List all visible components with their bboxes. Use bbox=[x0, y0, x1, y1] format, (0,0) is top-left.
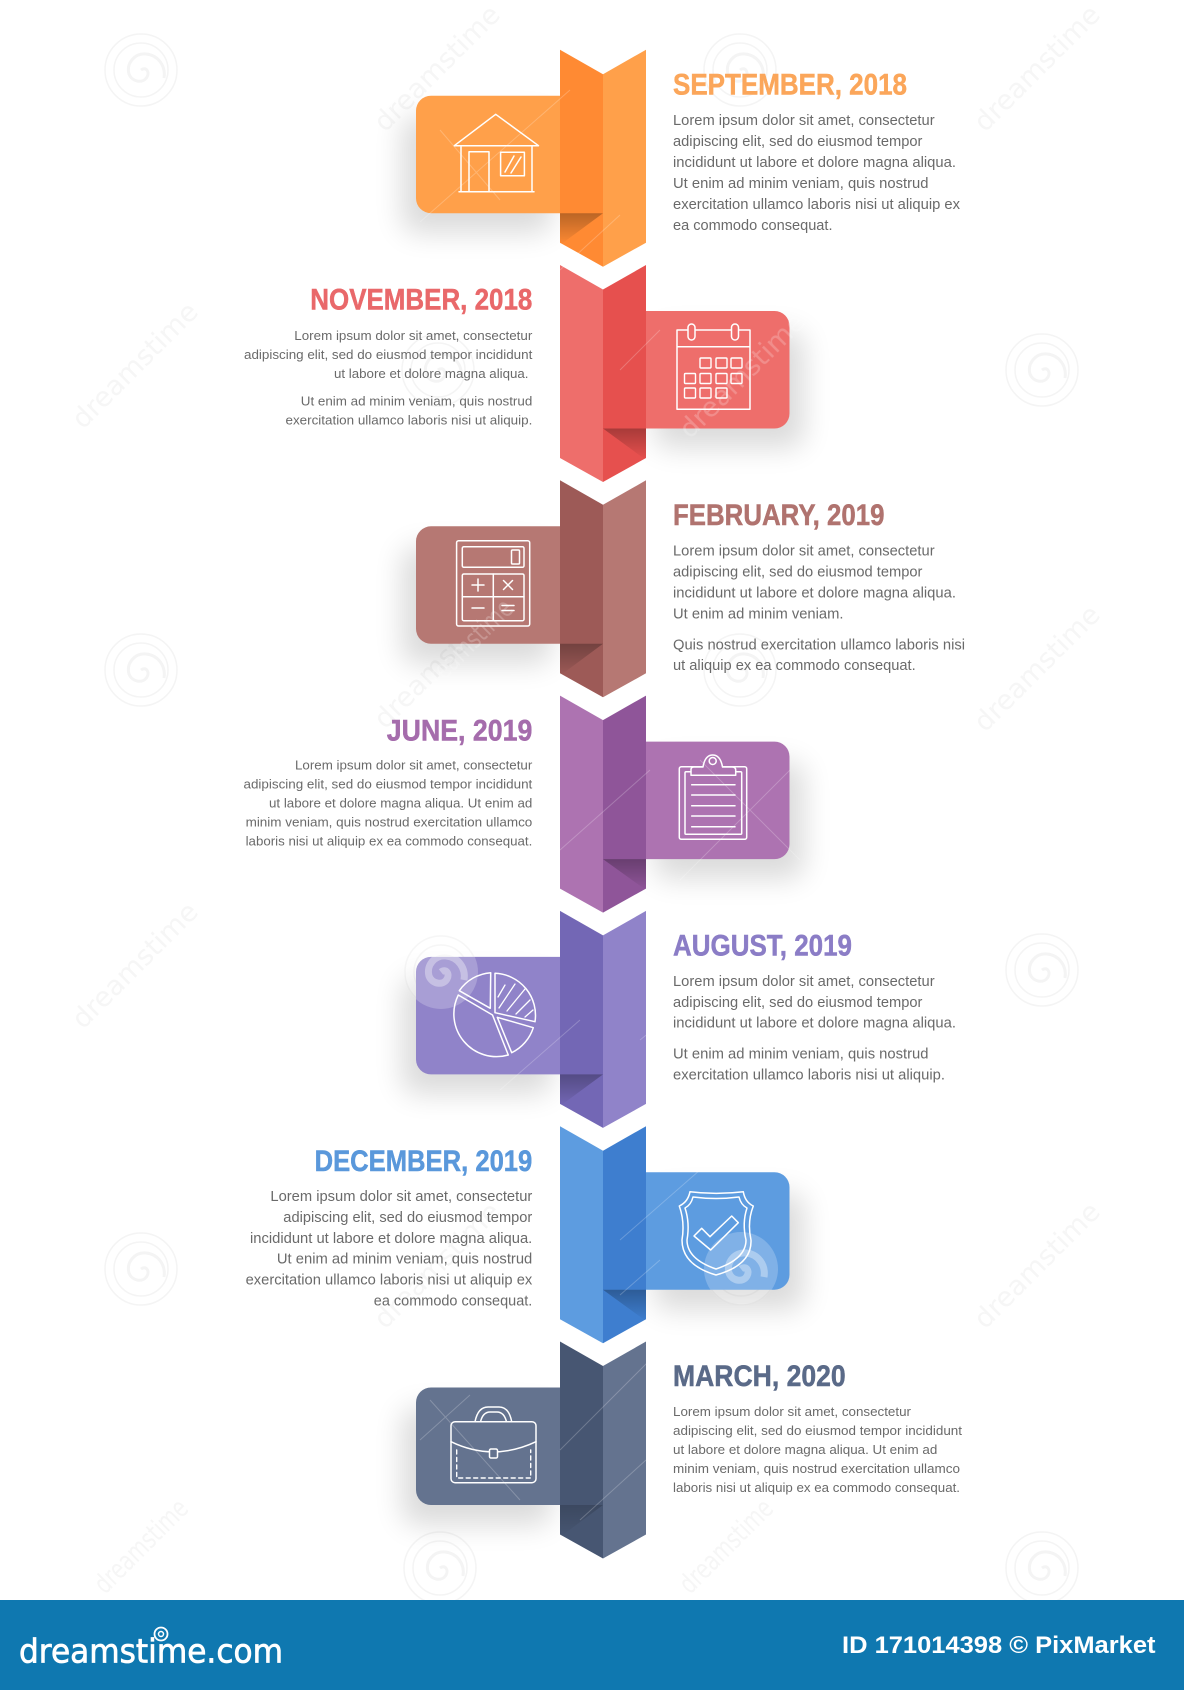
step 1: September 2018 bbox=[402, 50, 961, 267]
body text: incididunt ut labore et dolore magna aliqua. bbox=[250, 1231, 532, 1247]
watermark layer: background: dreamstime bbox=[66, 896, 205, 1035]
card bbox=[416, 1388, 576, 1505]
card bbox=[630, 311, 790, 428]
body text: adipiscing elit, sed do eiusmod tempor incididunt bbox=[244, 776, 533, 792]
watermark layer: background: dreamstime bbox=[673, 1493, 780, 1600]
body text: Ut enim ad minim veniam, quis nostrud bbox=[301, 394, 532, 409]
body text bbox=[244, 758, 533, 848]
watermark layer: background: dreamstime bbox=[368, 0, 507, 138]
card bbox=[416, 957, 576, 1074]
body text: ea commodo consequat. bbox=[673, 218, 832, 234]
body text: minim veniam, quis nostrud exercitation ullamco bbox=[673, 1461, 960, 1476]
card shadow bbox=[402, 977, 552, 1094]
step 2: November 2018 bbox=[244, 265, 804, 482]
heading: AUGUST, 2019 bbox=[673, 930, 852, 962]
watermark words and lattice on cards bbox=[413, 90, 812, 1520]
body text: adipiscing elit, sed do eiusmod tempor incididunt bbox=[244, 347, 533, 362]
body text: Lorem ipsum dolor sit amet, consectetur bbox=[673, 113, 935, 129]
watermark layer: background: dreamstime bbox=[968, 599, 1107, 738]
body text: adipiscing elit, sed do eiusmod tempor bbox=[673, 995, 923, 1011]
card bbox=[416, 96, 576, 213]
image credit: ID 171014398 © PixMarket bbox=[842, 1632, 1156, 1659]
ribbon fold bbox=[560, 50, 646, 267]
body text: incididunt ut labore et dolore magna aliqua. bbox=[673, 1016, 956, 1032]
card bbox=[416, 526, 576, 644]
watermark layer: background: dreamstime bbox=[368, 1196, 507, 1335]
spiral on blue card bbox=[704, 1232, 778, 1306]
body text: Ut enim ad minim veniam, quis nostrud bbox=[673, 176, 928, 192]
body text: laboris nisi ut aliquip ex ea commodo consequat. bbox=[246, 834, 532, 848]
footer bar bbox=[0, 1600, 1184, 1690]
body text bbox=[673, 974, 956, 1083]
icon: clipboard bbox=[679, 755, 747, 839]
watermark words and lattice on cards: dreamstime bbox=[673, 306, 812, 445]
card bbox=[630, 742, 790, 859]
ribbon fold bbox=[560, 480, 646, 697]
heading: FEBRUARY, 2019 bbox=[673, 499, 884, 532]
watermark layer: background: dreamstime bbox=[968, 1196, 1107, 1335]
card bbox=[630, 1172, 790, 1290]
watermark layer: background: dreamstime bbox=[968, 0, 1107, 138]
body text: Lorem ipsum dolor sit amet, consectetur bbox=[673, 544, 935, 560]
ribbon fold bbox=[560, 911, 646, 1128]
card shadow bbox=[402, 547, 552, 664]
body text: ut labore et dolore magna aliqua. Ut enim ad bbox=[269, 796, 532, 810]
body text: ea commodo consequat. bbox=[374, 1294, 532, 1310]
body text: exercitation ullamco laboris nisi ut aliquip. bbox=[673, 1067, 945, 1083]
body text: exercitation ullamco laboris nisi ut aliquip. bbox=[286, 413, 532, 428]
body text: Lorem ipsum dolor sit amet, consectetur bbox=[673, 1404, 912, 1419]
icon: shield bbox=[679, 1192, 753, 1275]
body text: Ut enim ad minim veniam, quis nostrud bbox=[277, 1252, 532, 1268]
body text: Lorem ipsum dolor sit amet, consectetur bbox=[270, 1189, 532, 1205]
heading: MARCH, 2020 bbox=[673, 1360, 846, 1393]
body text: Quis nostrud exercitation ullamco laboris nisi bbox=[673, 637, 965, 653]
body text: Lorem ipsum dolor sit amet, consectetur bbox=[673, 974, 935, 990]
body text bbox=[673, 1404, 962, 1495]
watermark layer: background: dreamstime bbox=[88, 1493, 195, 1600]
body text: incididunt ut labore et dolore magna aliqua. bbox=[673, 155, 956, 171]
step 7: March 2020 bbox=[402, 1342, 962, 1558]
body text: adipiscing elit, sed do eiusmod tempor bbox=[283, 1210, 532, 1226]
icon: pie chart bbox=[454, 973, 535, 1057]
ribbon fold bbox=[560, 265, 646, 482]
watermark words and lattice on cards: dreamstime bbox=[413, 593, 520, 700]
body text bbox=[673, 544, 965, 674]
card shadow bbox=[402, 116, 552, 233]
body text: ut aliquip ex ea commodo consequat. bbox=[673, 658, 916, 674]
body text: adipiscing elit, sed do eiusmod tempor incididunt bbox=[673, 1423, 962, 1438]
card shadow bbox=[402, 1408, 552, 1525]
body text: minim veniam, quis nostrud exercitation ullamco bbox=[246, 814, 532, 830]
icon: calculator bbox=[457, 541, 530, 626]
body text: laboris nisi ut aliquip ex ea commodo consequat. bbox=[673, 1480, 960, 1495]
body text: Lorem ipsum dolor sit amet, consectetur bbox=[294, 328, 533, 343]
spiral on violet card bbox=[404, 935, 478, 1009]
icon: house bbox=[454, 114, 538, 192]
step 3: February 2019 bbox=[402, 480, 965, 697]
heading: DECEMBER, 2019 bbox=[315, 1145, 532, 1178]
card shadow bbox=[654, 331, 804, 448]
icon: calendar bbox=[677, 324, 750, 409]
watermark layer: overlay bbox=[404, 90, 812, 1520]
body text: Ut enim ad minim veniam. bbox=[673, 606, 844, 622]
body text bbox=[673, 113, 961, 234]
ribbon fold bbox=[560, 1342, 646, 1558]
step 5: August 2019 bbox=[402, 911, 956, 1128]
watermark layer: background: dreamstime bbox=[368, 596, 507, 735]
step 4: June 2019 bbox=[244, 696, 804, 913]
card shadow bbox=[654, 762, 804, 879]
body text: adipiscing elit, sed do eiusmod tempor bbox=[673, 564, 923, 580]
watermark layer: background: dreamstime bbox=[66, 296, 205, 435]
heading: SEPTEMBER, 2018 bbox=[673, 68, 907, 101]
card shadow bbox=[654, 1193, 804, 1310]
body text: ut labore et dolore magna aliqua. bbox=[334, 366, 528, 381]
body text: ut labore et dolore magna aliqua. Ut enim ad bbox=[673, 1442, 937, 1457]
icon: briefcase bbox=[451, 1407, 536, 1483]
heading: NOVEMBER, 2018 bbox=[310, 284, 532, 317]
body text: exercitation ullamco laboris nisi ut aliquip ex bbox=[673, 197, 961, 213]
logo: dreamstime.com: dreamstime.com bbox=[19, 1632, 283, 1670]
body text bbox=[246, 1189, 533, 1310]
ribbon fold bbox=[560, 696, 646, 913]
body text: Lorem ipsum dolor sit amet, consectetur bbox=[295, 758, 533, 772]
body text: incididunt ut labore et dolore magna aliqua. bbox=[673, 585, 956, 601]
heading: JUNE, 2019 bbox=[387, 714, 532, 747]
body text: exercitation ullamco laboris nisi ut aliquip ex bbox=[246, 1273, 533, 1289]
body text: adipiscing elit, sed do eiusmod tempor bbox=[673, 134, 923, 150]
body text: Ut enim ad minim veniam, quis nostrud bbox=[673, 1047, 928, 1063]
body text bbox=[244, 328, 533, 428]
ribbon fold bbox=[560, 1126, 646, 1343]
step 6: December 2019 bbox=[246, 1126, 804, 1343]
